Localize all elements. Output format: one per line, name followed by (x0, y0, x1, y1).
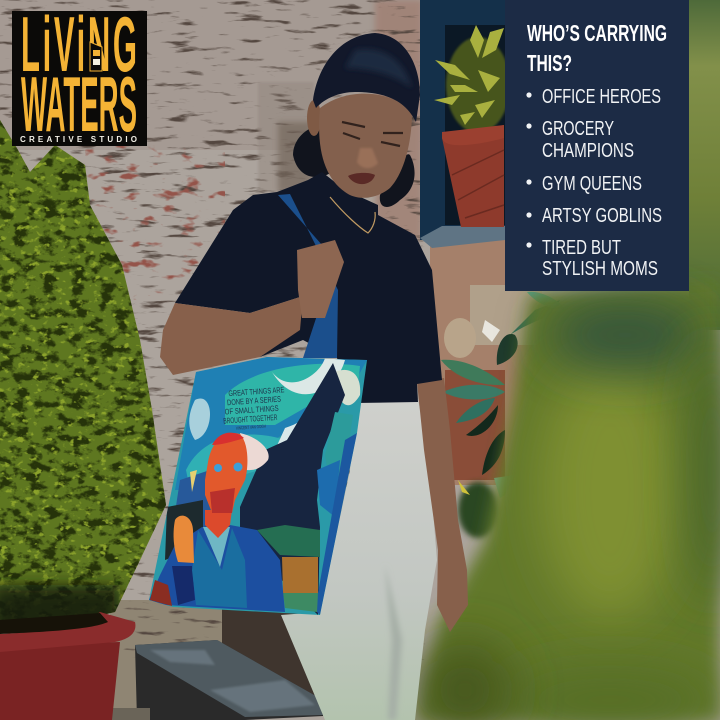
logo wordmark: Living: LiViNG (21, 1, 137, 88)
hand (174, 516, 194, 563)
shrubs and ground (257, 525, 320, 557)
logo subtitle: CREATIVE STUDIO (20, 135, 137, 144)
quote text on the bag: BROUGHT TOGETHER (223, 413, 278, 426)
lips (348, 173, 375, 184)
tote bag (149, 357, 367, 615)
logo wordmark: Waters: WATERS (21, 61, 137, 148)
brick pillar (420, 226, 542, 485)
audience list: GYM QUEENS (542, 172, 642, 195)
quote text on the bag: VINCENT VAN GOGH (236, 424, 266, 431)
quote text on the bag: GREAT THINGS ARE (228, 385, 285, 398)
audience list: TIRED BUT (542, 236, 621, 259)
stone steps (110, 606, 323, 720)
audience list: STYLISH MOMS (542, 257, 658, 280)
audience list: OFFICE HEROES (542, 85, 661, 108)
red flower pot (0, 612, 135, 720)
necklace (330, 197, 375, 233)
back hair right (380, 154, 415, 207)
dark blue door (420, 0, 506, 240)
face (319, 94, 412, 198)
neck (205, 510, 232, 538)
left cypress bush (0, 120, 170, 645)
quote text on the bag: DONE BY A SERIES (227, 395, 281, 407)
hair top (313, 33, 420, 122)
audience list: CHAMPIONS (542, 139, 634, 162)
potted plant on the pillar (434, 25, 510, 227)
right arm (417, 378, 468, 632)
dark tree (240, 363, 345, 615)
sky swirls (175, 357, 367, 490)
head (205, 433, 247, 513)
quote text on the bag (221, 385, 287, 432)
broad-leaf plant beside the woman (441, 292, 565, 538)
right blurred foreground foliage (415, 0, 720, 720)
strap (278, 194, 338, 358)
trouser shading (385, 565, 402, 720)
eyes and brows (342, 122, 403, 146)
quote text on the bag: OF SMALL THINGS (224, 404, 279, 416)
panel heading (527, 20, 667, 76)
logo (12, 1, 147, 148)
panel heading: THIS? (527, 50, 572, 76)
hand (297, 240, 344, 318)
turban (240, 433, 269, 470)
back hair left (293, 125, 335, 177)
ear (307, 100, 321, 136)
audience list (526, 85, 662, 280)
trousers (281, 399, 437, 720)
panel: who's carrying this (505, 0, 689, 291)
logo house icon (90, 42, 102, 71)
audience list: GROCERY (542, 117, 614, 140)
woman (160, 33, 468, 720)
audience list: ARTSY GOBLINS (542, 204, 662, 227)
nose (357, 148, 378, 168)
left arm (160, 296, 303, 375)
jacket (149, 525, 285, 612)
flame and sky behind (176, 471, 211, 527)
black top (175, 172, 442, 403)
